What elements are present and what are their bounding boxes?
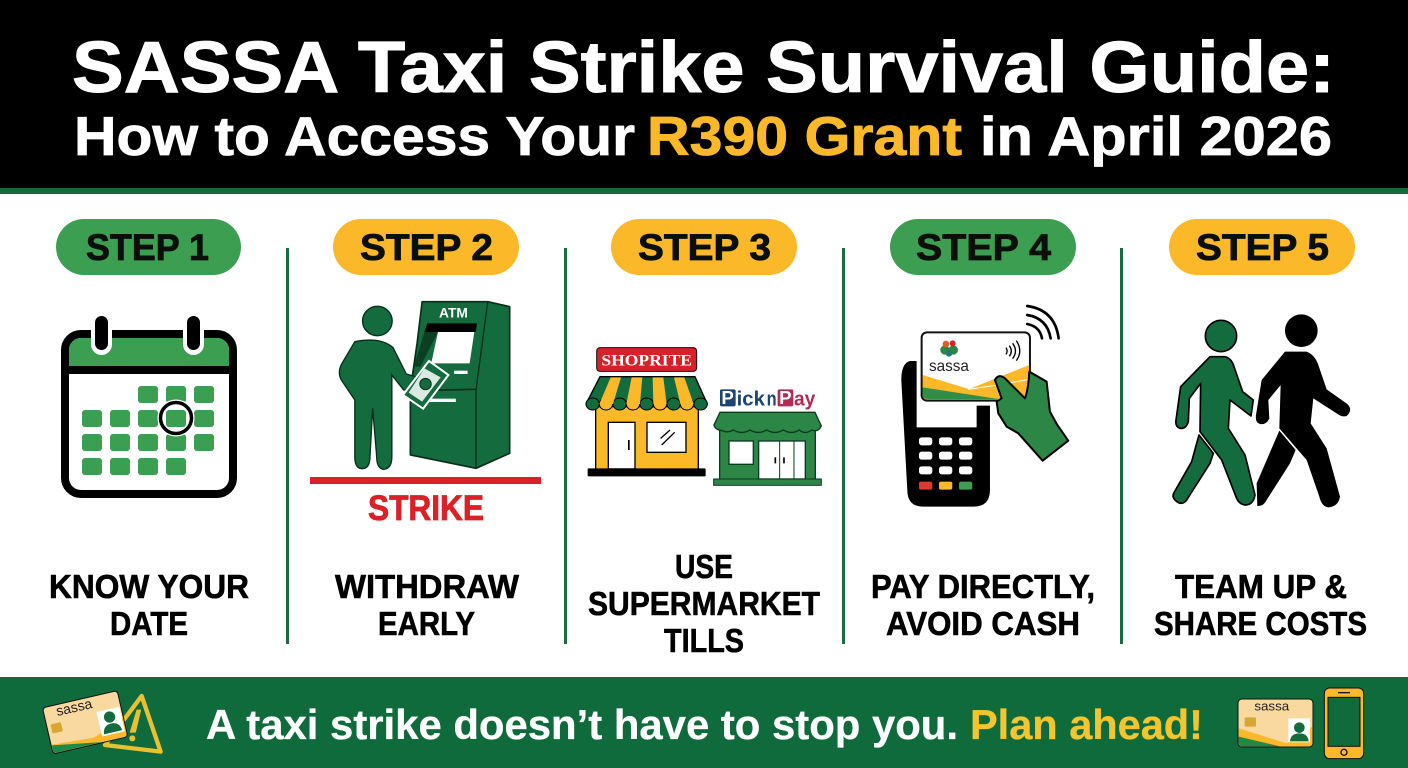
step 2 caption: EARLY [378,605,475,642]
Pick n Pay store [714,387,821,485]
step 2 badge [333,219,519,275]
icon: card payment terminal [901,306,1068,507]
SASSA card: sassa [1254,699,1290,714]
hand [995,372,1068,461]
step 2 caption: WITHDRAW [335,568,520,605]
step 3 caption: USE [675,548,733,585]
step 1 caption [49,568,249,642]
footer message: Plan ahead! [970,701,1203,748]
icon: person at ATM [339,302,510,469]
step 1 badge [56,219,241,275]
step 1 caption: KNOW YOUR [49,568,249,605]
title line 2: R390 Grant [647,105,962,167]
title line 1: SASSA Taxi Strike Survival Guide: [72,28,1335,108]
Pick n Pay store: ick [737,387,765,410]
panel: step 2 [310,219,541,642]
step 4 caption: AVOID CASH [886,605,1080,642]
step 3 badge [611,219,797,275]
strike label: STRIKE [368,489,484,528]
icon: supermarkets [586,348,821,485]
phone [1324,688,1364,759]
Shoprite store [586,348,707,476]
step 5 badge [1169,219,1355,275]
step 3 badge: STEP 3 [638,227,771,268]
step 4 badge: STEP 4 [916,227,1051,268]
Pick n Pay store: P [779,387,792,408]
panel: step 5 [1154,219,1367,642]
step 1 caption: DATE [110,605,188,642]
step 2 badge: STEP 2 [360,227,493,268]
step 4 caption: PAY DIRECTLY, [871,568,1095,605]
Pick n Pay store: P [721,387,734,408]
step 5 badge: STEP 5 [1196,227,1329,268]
step 5 caption: SHARE COSTS [1154,605,1367,642]
SASSA card [922,332,1030,401]
panel: step 4 [871,219,1095,642]
column dividers [286,248,1123,644]
step 4 caption [871,568,1095,642]
black walker [1256,314,1350,507]
panel: step 1 [49,219,249,642]
step 5 caption: TEAM UP & [1175,568,1347,605]
Shoprite store: SHOPRITE [601,352,692,369]
icon: SASSA card with warning triangle: sassa [54,695,94,719]
Pick n Pay store: ay [794,387,816,410]
step 5 caption [1154,568,1367,642]
title line 2: How to Access Your [74,105,635,167]
footer banner [0,677,1408,768]
step 3 caption: TILLS [664,622,744,659]
step 3 caption [588,548,820,659]
title line 2 [74,105,1332,167]
icon: SASSA card and phone [1238,688,1364,759]
footer message: A taxi strike doesn’t have to stop you. [206,701,958,748]
icon: two people walking [1173,314,1350,507]
icon: calendar [65,312,233,494]
Pick n Pay store: n [767,387,777,410]
step 3 caption: SUPERMARKET [588,585,820,622]
icon: person at ATM: ATM [439,305,468,320]
header banner [0,0,1408,194]
panel: step 3 [586,219,821,659]
strike line [310,477,541,484]
contactless waves [1027,306,1059,338]
green walker [1173,320,1255,505]
title line 2: in April 2026 [980,105,1332,167]
step 2 caption [335,568,520,642]
step 1 badge: STEP 1 [86,227,209,268]
step 4 badge [890,219,1076,275]
SASSA card: sassa [929,358,969,375]
icon: SASSA card with warning triangle [42,689,161,754]
